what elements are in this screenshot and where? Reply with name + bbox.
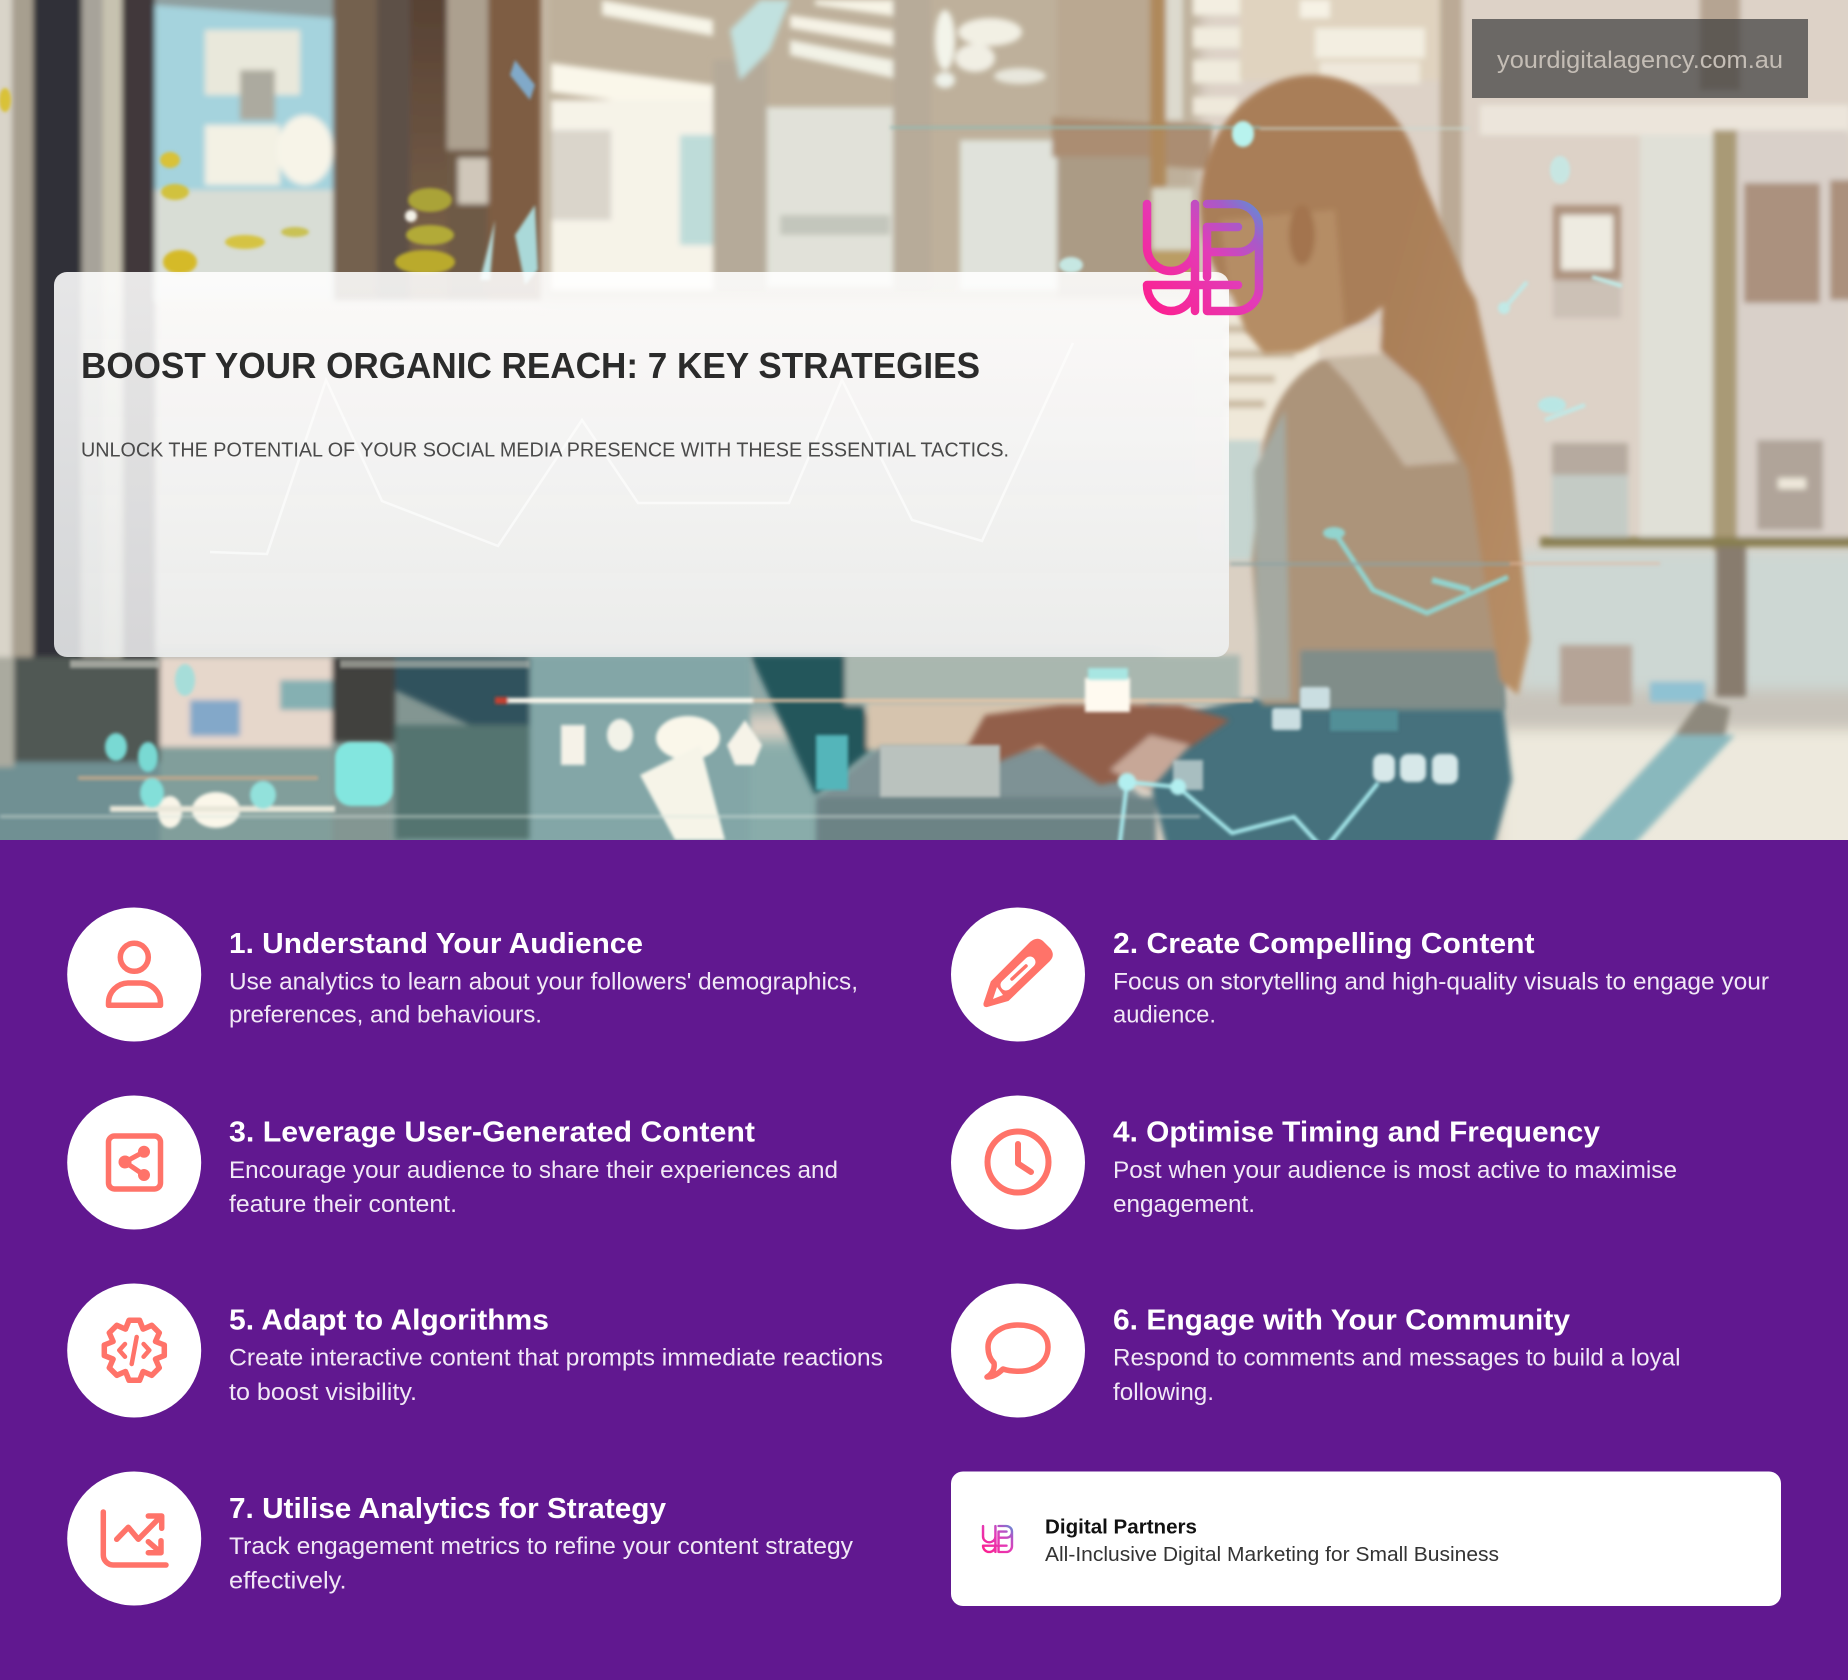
right building [1640,135,1713,545]
left architecture columns [0,640,14,660]
item 2: create compelling content: audience. [1113,1002,1216,1028]
item 6: engage with your community: Respond to comments and messages to build a loyal [1113,1344,1680,1372]
item 2: create compelling content [951,908,1769,1042]
left window [150,2,338,192]
item 1: understand your audience: Use analytics to learn about your followers' demographics, [229,968,858,996]
diagonal floor stripe [1574,731,1736,840]
item 2: create compelling content: 2. Create Compelling Content [1113,928,1535,960]
torso and hair [1200,75,1530,710]
brand card: digital partners: All-Inclusive Digital Marketing for Small Business [1045,1544,1499,1566]
subtitle: UNLOCK THE POTENTIAL OF YOUR SOCIAL MEDIA PRESENCE WITH THESE ESSENTIAL TACTICS. [81,440,1009,462]
item 4: optimise timing and frequency [951,1096,1677,1230]
item 6: engage with your community: following. [1113,1379,1214,1406]
holographic data overlay [0,60,1660,850]
item 1: understand your audience [67,908,858,1042]
jeans [1148,690,1516,840]
top right [1239,0,1316,78]
item 6: engage with your community [951,1284,1680,1418]
item 4: optimise timing and frequency: engagement. [1113,1191,1255,1218]
item 5: adapt to algorithms [67,1284,883,1418]
item 3: leverage user-generated content [67,1096,838,1230]
laptop screen [750,655,877,795]
lower left [0,657,160,762]
icon: small logo [983,1526,1012,1552]
item 3: leverage user-generated content: 3. Leverage User-Generated Content [229,1116,755,1148]
item 5: adapt to algorithms: to boost visibility. [229,1379,417,1406]
item 7: utilise analytics for strategy [67,1472,853,1606]
brand card: digital partners [951,1472,1781,1606]
icon: pencil [984,940,1052,1006]
item 3: leverage user-generated content: feature their content. [229,1191,457,1218]
item 5: adapt to algorithms: 5. Adapt to Algorithms [229,1304,549,1336]
blinds beside the face [1225,305,1320,560]
title: BOOST YOUR ORGANIC REACH: 7 KEY STRATEGIES [81,345,980,386]
item 7: utilise analytics for strategy: effectively. [229,1568,346,1594]
lower right window [1540,537,1848,547]
background: purple lower section [0,840,1848,1680]
yellow plants [160,152,180,168]
logo: large gradient monogram [1147,204,1259,311]
item 5: adapt to algorithms: Create interactive content that prompts immediate reactions [229,1344,883,1372]
item 1: understand your audience: preferences, and behaviours. [229,1002,542,1028]
website address badge [1472,19,1808,98]
item 1: understand your audience: 1. Understand Your Audience [229,928,643,960]
hero photo: woman at laptop in a bright office [0,0,1848,875]
icon: speech bubble [987,1325,1048,1377]
panel: translucent title card [54,272,1229,657]
item 2: create compelling content: Focus on storytelling and high-quality visuals to engage your [1113,968,1769,996]
brand card: digital partners: Digital Partners [1045,1516,1197,1538]
icon: share in a square [108,1136,160,1189]
central windows [548,60,717,104]
icon: clock [988,1132,1048,1192]
laptop base [816,747,1145,800]
item 7: utilise analytics for strategy: 7. Utilise Analytics for Strategy [229,1493,666,1525]
icon: analytics chart [103,1512,166,1565]
item 3: leverage user-generated content: Encourage your audience to share their experiences and [229,1157,838,1184]
right-side blocks [1300,687,1330,709]
item 4: optimise timing and frequency: Post when your audience is most active to maximise [1113,1157,1677,1184]
item 7: utilise analytics for strategy: Track engagement metrics to refine your content strategy [229,1533,853,1560]
hands [960,705,1230,790]
wood frame [333,0,377,300]
item 6: engage with your community: 6. Engage with Your Community [1113,1304,1570,1336]
icon: gear with code symbol [104,1320,164,1380]
website address badge: yourdigitalagency.com.au [1497,47,1783,74]
item 4: optimise timing and frequency: 4. Optimise Timing and Frequency [1113,1116,1600,1148]
icon: person [108,943,160,1005]
